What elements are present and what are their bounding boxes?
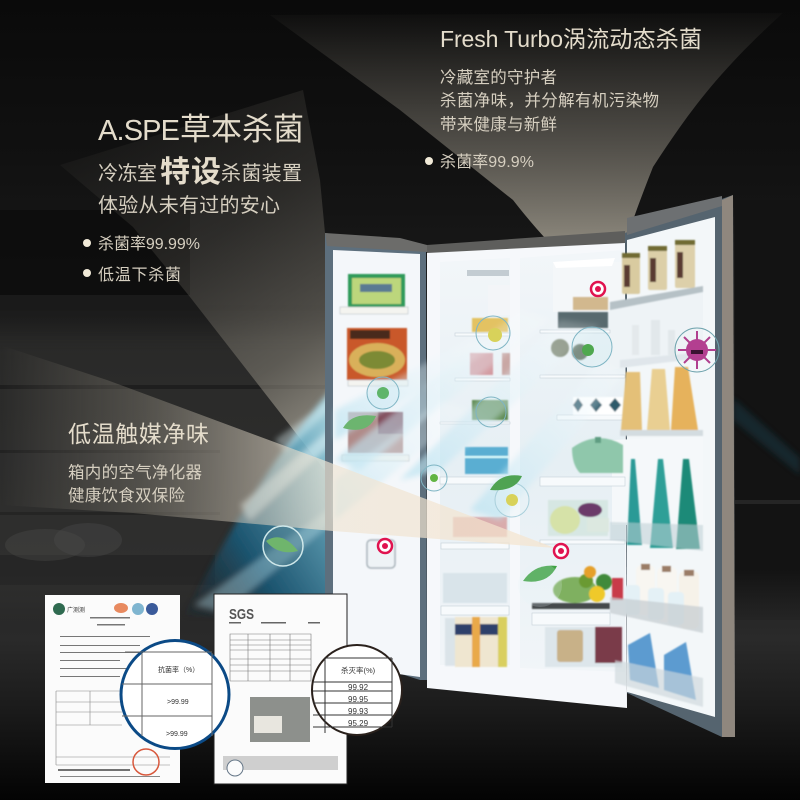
certificate: left test report: 广测测 — [67, 606, 85, 614]
light beam: low temperature catalyst cone — [0, 345, 555, 548]
food: teal bottles — [610, 459, 703, 551]
cabinet top band — [427, 231, 625, 254]
blue air swoosh behind door — [185, 385, 800, 615]
magnifier: kill rate: 99.95 — [348, 695, 369, 704]
refrigerator — [325, 195, 735, 737]
heading block: Fresh Turbo: 带来健康与新鲜 — [440, 115, 557, 134]
heading block: A.SPE: 体验从未有过的安心 — [98, 194, 280, 217]
heading block: low temperature catalyst: 健康饮食双保险 — [68, 486, 186, 505]
certificate: SGS test report — [214, 594, 347, 784]
magnifier: kill rate: 95.29 — [348, 719, 369, 728]
bullet: 杀菌率99.9%: 杀菌率99.9% — [440, 153, 534, 171]
certificate: left test report — [45, 595, 180, 783]
heading block: Fresh Turbo: Fresh Turbo — [440, 26, 563, 52]
food: juice bottles — [620, 367, 703, 436]
icon: bacteria bubbles and leaves — [343, 316, 612, 607]
food: blue bags — [615, 633, 703, 707]
heading block: A.SPE: A.SPE — [98, 115, 180, 147]
light beam: left freezer cone — [60, 90, 383, 545]
heading block: A.SPE: 特设 — [160, 156, 221, 189]
magnifier: kill rate — [312, 645, 402, 735]
heading block: low temperature catalyst — [68, 421, 209, 505]
magnifier: kill rate: 杀灭率(%) — [341, 665, 376, 675]
icon: virus — [675, 328, 719, 372]
cold air rays across the interior — [335, 310, 625, 520]
icon: target marker lower — [554, 544, 568, 558]
heading block: A.SPE: 草本杀菌 — [180, 112, 304, 147]
food: freezer compartments — [443, 318, 510, 667]
left door frame — [325, 233, 427, 680]
right door frame — [625, 195, 735, 737]
heading block: Fresh Turbo — [440, 26, 702, 134]
bullet: 低温下杀菌: 低温下杀菌 — [98, 266, 181, 284]
magnifier: antibacterial rate: >99.99 — [166, 731, 188, 738]
heading block: A.SPE: 冷冻室 — [98, 162, 157, 185]
food: milk bottles — [610, 564, 703, 633]
cabinet interior — [427, 243, 627, 708]
icon: target marker upper — [591, 282, 605, 296]
certificate: SGS test report: SGS — [229, 606, 254, 623]
magnifier: antibacterial rate: >99.99 — [167, 699, 189, 706]
heading block: low temperature catalyst: 箱内的空气净化器 — [68, 463, 202, 482]
heading block: Fresh Turbo: 杀菌净味，并分解有机污染物 — [440, 91, 659, 110]
fridge shelves — [532, 330, 625, 625]
heading block: Fresh Turbo: 冷藏室的守护者 — [440, 68, 557, 87]
icon: target marker door — [378, 539, 392, 553]
magnifier: kill rate: 99.92 — [348, 683, 369, 692]
heading block: low temperature catalyst: 低温触媒净味 — [68, 421, 209, 447]
icon: leaf bubble — [263, 526, 303, 566]
door shelf boxes — [610, 290, 703, 370]
magnifier: kill rate: 99.93 — [348, 707, 369, 716]
food: door shelf cans — [610, 240, 703, 368]
heading block: Fresh Turbo: 涡流动态杀菌 — [563, 26, 702, 52]
right door inner — [627, 217, 715, 717]
magnifier: antibacterial rate: 抗菌率（%） — [158, 665, 199, 674]
food: left door — [340, 274, 409, 568]
magnifier: antibacterial rate — [121, 640, 229, 748]
heading block: A.SPE: 杀菌装置 — [221, 162, 302, 185]
left door inner — [333, 250, 420, 677]
freezer shelves — [440, 333, 510, 615]
heading block: A.SPE — [98, 112, 304, 217]
light beam: top freshness cone — [270, 13, 783, 290]
food: fridge compartments — [532, 297, 623, 667]
bullet: 杀菌率99.99%: 杀菌率99.99% — [98, 235, 200, 253]
